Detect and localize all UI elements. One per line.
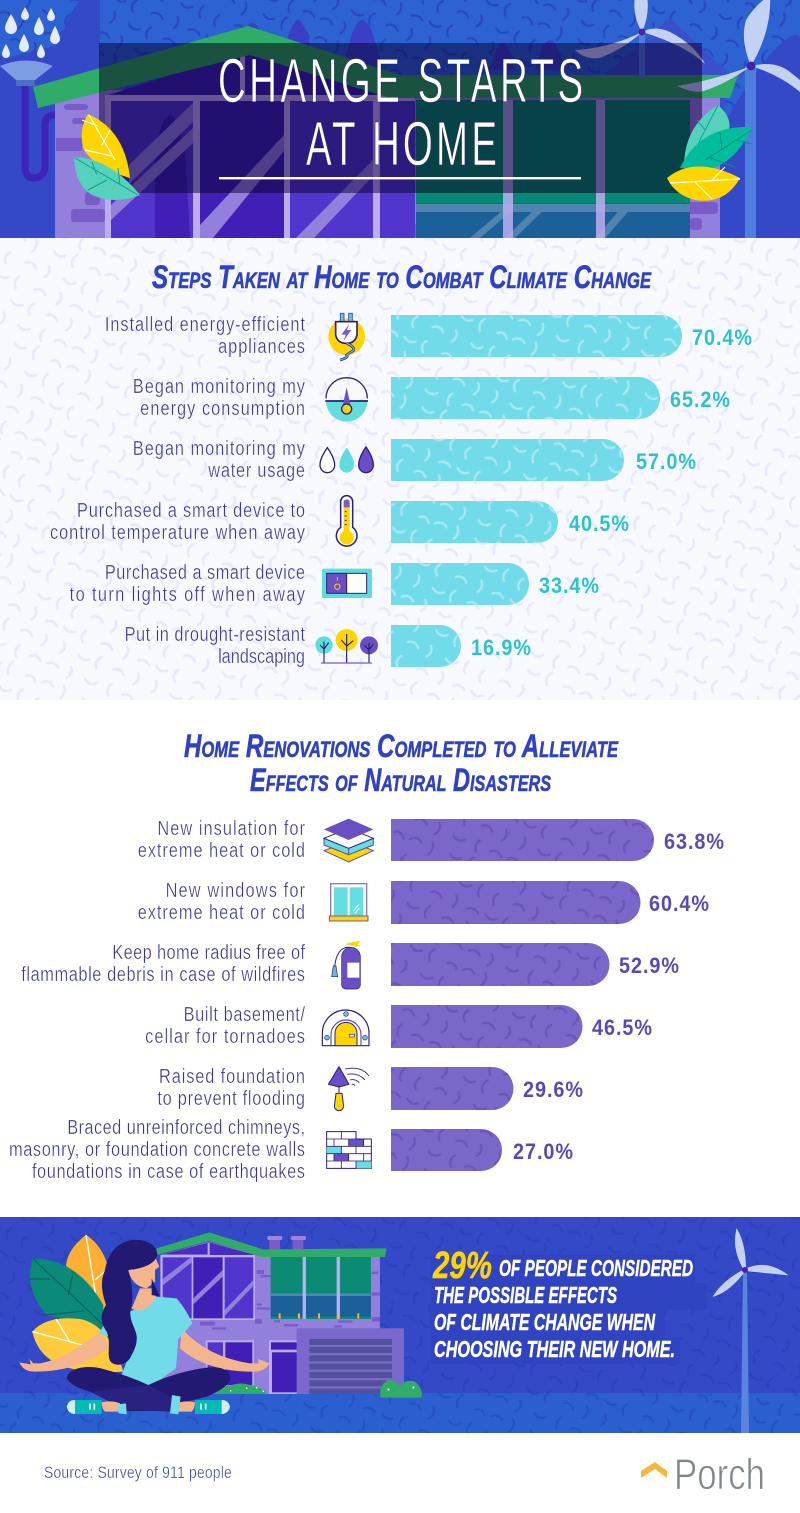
callout: 29% statistic: OF CLIMATE CHANGE WHEN (434, 1309, 655, 1335)
bar: 60.4% (391, 881, 640, 924)
leaves (28, 1235, 123, 1372)
icon: light switch (322, 569, 372, 598)
row: windows: 60.4% (649, 892, 709, 916)
row: braced walls: foundations in case of earthquakes (32, 1159, 305, 1182)
row: raised foundation: 29.6% (523, 1078, 583, 1102)
callout: 29% statistic: CHOOSING THEIR NEW HOME. (434, 1336, 675, 1362)
icon: storm cellar (322, 1010, 369, 1046)
row: energy consumption: energy consumption (140, 396, 305, 419)
icon: trees (315, 629, 378, 663)
row: basement: 46.5% (592, 1016, 652, 1040)
row: water usage (133, 436, 696, 481)
icon: banner wind turbine (715, 1231, 785, 1433)
row: drought-resistant landscaping (125, 622, 531, 667)
row: windows: extreme heat or cold (138, 900, 305, 923)
row: basement: Built basement/ (184, 1002, 306, 1025)
row: smart temperature device (50, 496, 629, 546)
row: flammable debris: Keep home radius free of (112, 940, 306, 963)
panel: steps taken background (0, 238, 800, 700)
icon: brick wall (327, 1132, 371, 1168)
row: flammable debris: 52.9% (619, 954, 679, 978)
row: insulation (138, 816, 724, 862)
bar: 65.2% (391, 377, 660, 419)
icon: left leaves (74, 114, 140, 200)
row: basement (145, 1002, 652, 1048)
row: smart temperature device: 40.5% (569, 512, 629, 536)
heading: home renovations (184, 728, 619, 798)
icon: shower head and pipe (0, 60, 55, 178)
heading: home renovations: Home Renovations Completed to Alleviate (184, 728, 619, 764)
row: water usage: water usage (207, 458, 305, 481)
illustration: woman meditating before house (19, 1232, 422, 1414)
bar: 33.4% (391, 563, 529, 605)
heading: home renovations: Effects of Natural Disasters (250, 762, 551, 798)
icon: window (329, 884, 368, 921)
woman (19, 1240, 269, 1414)
house front (33, 26, 738, 238)
row: drought-resistant landscaping: Put in drought-resistant (125, 622, 305, 645)
icon: plug (328, 313, 365, 360)
row: flammable debris: flammable debris in case of wildfires (21, 962, 305, 985)
row: smart lights device: 33.4% (539, 574, 599, 598)
row: drought-resistant landscaping: landscaping (218, 644, 305, 667)
row: smart lights device: to turn lights off when away (70, 582, 306, 605)
row: raised foundation (157, 1064, 583, 1111)
icon: wind turbines (575, 0, 800, 238)
callout: 29% statistic: OF PEOPLE CONSIDERED (499, 1255, 693, 1281)
bar: 40.5% (391, 501, 558, 543)
row: smart lights device: Purchased a smart device (105, 560, 305, 583)
row: smart temperature device: Purchased a smart device to (77, 498, 305, 521)
bar: 16.9% (391, 625, 461, 667)
row: basement: cellar for tornadoes (145, 1024, 305, 1047)
row: flammable debris (21, 940, 679, 989)
row: smart temperature device: control temperature when away (50, 520, 306, 543)
row: water usage: Began monitoring my (133, 436, 306, 459)
row: energy consumption (133, 374, 730, 422)
header illustration (0, 0, 800, 238)
icon: rain drops (2, 7, 60, 58)
row: raised foundation: to prevent flooding (157, 1086, 305, 1109)
panel: bottom banner (0, 1217, 800, 1433)
bar: 27.0% (391, 1129, 502, 1171)
logo: Porch (641, 1450, 765, 1499)
row: energy consumption: Began monitoring my (133, 374, 306, 397)
heading: steps taken: Steps Taken at Home to Combat Climate Change (152, 259, 652, 295)
row: braced walls: 27.0% (513, 1140, 573, 1164)
bar: 70.4% (391, 315, 682, 357)
bar: 57.0% (391, 439, 624, 481)
icon: thermometer (336, 496, 357, 546)
title: CHANGE STARTS (218, 46, 583, 115)
row: energy-efficient appliances: appliances (218, 334, 305, 357)
callout: 29% statistic (430, 1245, 707, 1364)
row: water usage: 57.0% (636, 450, 696, 474)
icon: water drops (320, 447, 373, 473)
row: braced walls: masonry, or foundation concrete walls (9, 1137, 305, 1160)
title (218, 46, 583, 179)
house (157, 1232, 422, 1398)
row: insulation: extreme heat or cold (138, 838, 305, 861)
bar: 29.6% (391, 1067, 514, 1110)
icon: right leaves (667, 105, 752, 201)
row: insulation: 63.8% (664, 830, 724, 854)
bar: 63.8% (391, 819, 654, 861)
title backdrop (99, 43, 702, 193)
bar: 52.9% (391, 943, 610, 986)
row: windows: New windows for (166, 878, 305, 901)
row: drought-resistant landscaping: 16.9% (471, 636, 531, 660)
row: smart lights device (70, 560, 599, 605)
title: AT HOME (306, 109, 497, 178)
row: braced walls: Braced unreinforced chimneys, (67, 1115, 305, 1138)
row: braced walls (9, 1115, 573, 1182)
source note: Source: Survey of 911 people (44, 1464, 232, 1482)
icon: fire extinguisher (332, 941, 361, 989)
row: windows (138, 878, 709, 924)
row: energy-efficient appliances: 70.4% (692, 326, 752, 350)
callout: 29% statistic: THE POSSIBLE EFFECTS (434, 1282, 617, 1308)
callout: 29% statistic: 29% (432, 1245, 492, 1287)
icon: trowel (328, 1067, 369, 1111)
row: energy-efficient appliances: Installed energy-efficient (105, 312, 305, 335)
row: energy-efficient appliances (105, 312, 752, 360)
row: raised foundation: Raised foundation (159, 1064, 305, 1087)
bar: 46.5% (391, 1005, 582, 1048)
icon: insulation layers (324, 819, 373, 862)
icon: gauge (325, 378, 368, 422)
row: insulation: New insulation for (157, 816, 305, 839)
row: energy consumption: 65.2% (670, 388, 730, 412)
logo: Porch: Porch (674, 1450, 765, 1499)
